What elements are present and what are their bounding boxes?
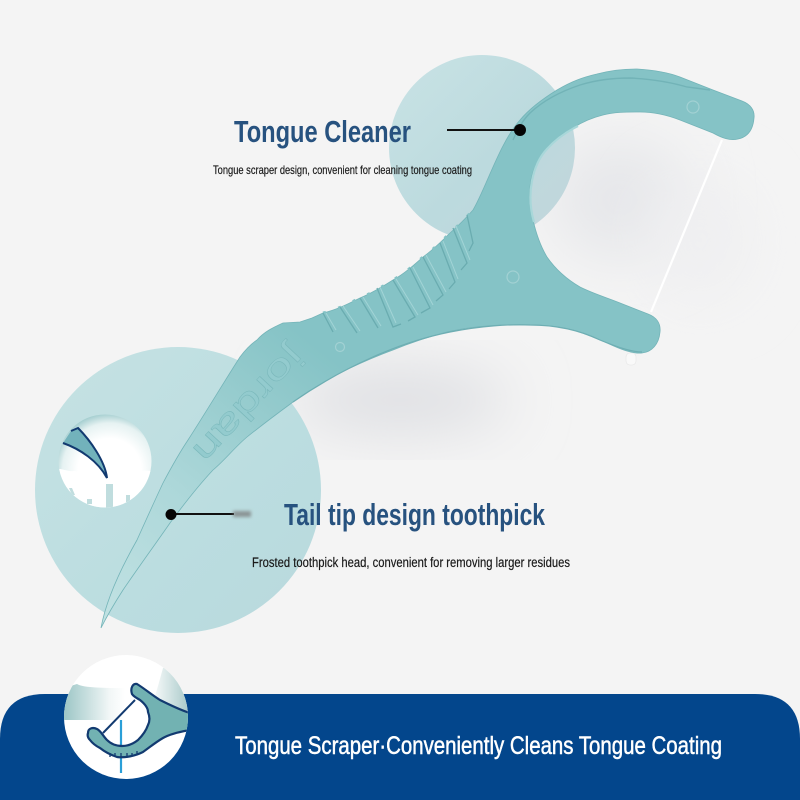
inner arm groove [513,78,710,140]
banner [0,694,800,800]
decorative circle: upper [389,55,575,241]
heading: tongue cleaner: Tongue Cleaner [234,114,411,149]
embossed marks [336,101,699,352]
embossed logo: jordan [185,337,313,471]
floss pick body [101,69,754,628]
callout: toothpick [166,509,251,520]
text: tongue cleaner description: Tongue scraper design, convenient for cleaning tongue coating [213,163,472,177]
grip ridges [323,215,473,333]
grip ridge highlights [326,226,470,331]
scalloped grip edge [323,210,473,313]
callout: tongue cleaner [447,124,526,136]
heading: toothpick: Tail tip design toothpick [284,497,546,532]
floss thread [626,140,722,365]
icon: floss pick on tooth [64,655,190,779]
text: toothpick description: Frosted toothpick head, convenient for removing larger residues [252,555,570,570]
decorative circle: lower [35,347,321,633]
icon: toothpick between teeth [59,414,152,508]
